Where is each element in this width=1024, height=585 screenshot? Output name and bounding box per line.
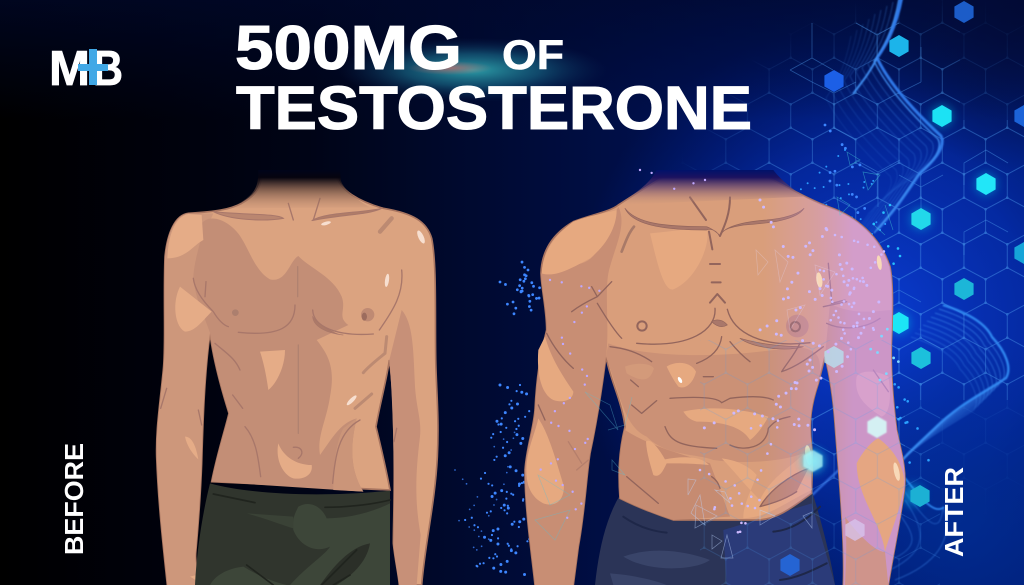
glow behind title [337,38,607,102]
logo letter M: M [49,42,90,96]
forearm highlight [857,438,904,552]
nipples [637,315,809,337]
body silhouette [157,175,438,585]
specular highlights [677,255,901,481]
lower arm tone [845,517,888,585]
purple energy overlay [525,175,905,585]
lower waist shading [333,418,363,492]
neck fade [617,170,803,205]
geometric triangle outlines [535,152,893,558]
logo letter B: B [93,42,123,96]
logo plus sign [78,49,108,85]
wave mesh [745,0,1008,580]
body silhouette [525,175,905,585]
overlay hex network on after figure [700,340,940,585]
chest and abdomen shading [193,218,363,492]
arm and abdomen shading [525,207,621,585]
green shorts [195,483,390,585]
title line 1: 500MG [235,14,462,83]
right arm shading [389,310,421,585]
title [235,14,752,142]
title connector word: OF [502,31,564,78]
particles on after figure [540,170,900,540]
neck fade [230,170,370,208]
highlights [167,214,312,582]
title line 2: TESTOSTERONE [236,74,752,142]
before label: BEFORE [59,443,89,555]
muscle lines [538,197,888,507]
glowing filled hexagons [824,1,1024,507]
overlay glowing hexagons on after figure [780,346,887,576]
after figure [525,170,905,585]
after label: AFTER [939,467,969,557]
skin specular highlights [321,220,426,406]
hexagon network background [692,0,1024,480]
muscle lines [161,198,402,483]
nipples [232,308,374,321]
navy shorts [595,490,835,585]
logo [49,42,123,96]
particle cloud: left of after figure [455,125,930,575]
skin highlights [526,210,890,518]
left arm shading [157,213,213,585]
before figure [157,170,438,585]
